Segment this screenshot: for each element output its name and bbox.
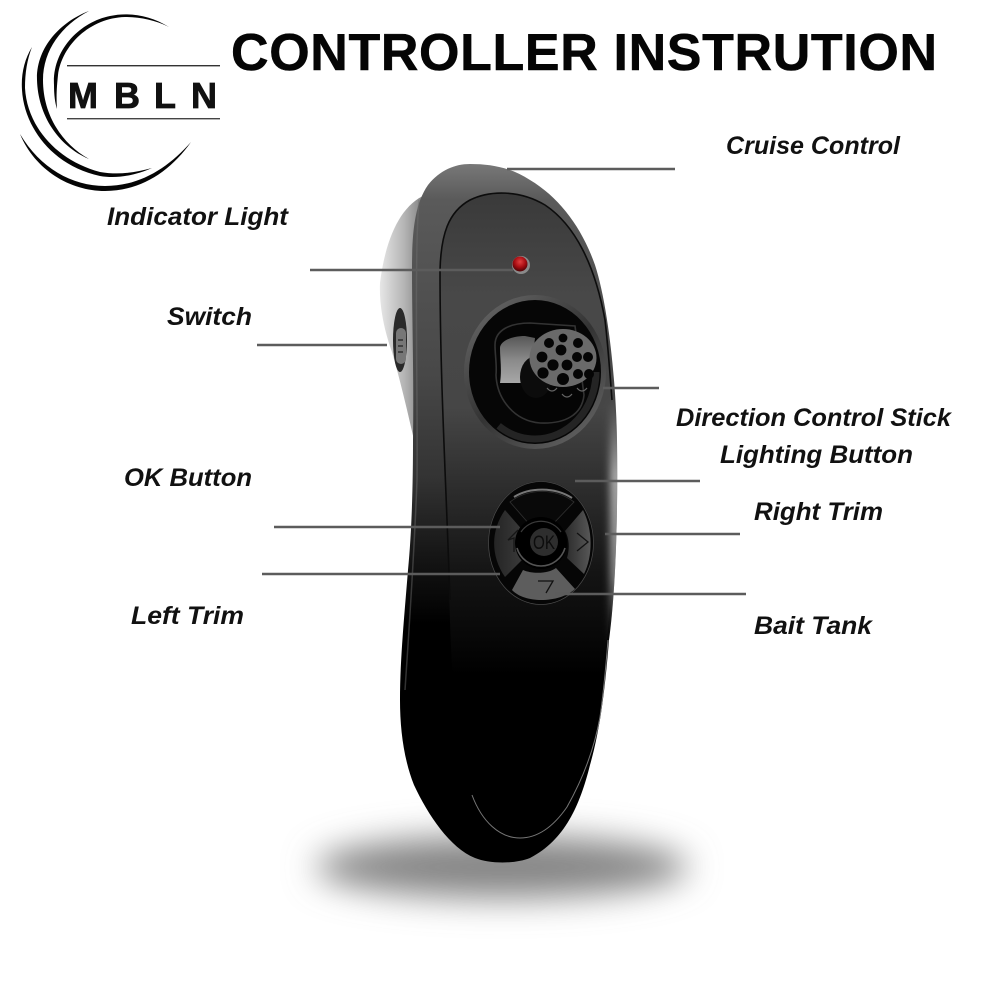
body left highlight [405,200,419,690]
down key: bait [512,568,575,600]
joystick grip [530,329,596,387]
logo: MBLN [20,11,220,191]
logo rule bottom [67,118,220,119]
body right highlight [610,400,622,650]
right key glyph [577,533,588,551]
controller [380,164,622,862]
up key highlight [514,490,572,498]
side switch [393,308,407,372]
logo arc: middle [22,47,152,177]
callout: Direction Control Stick: Direction Control Stick [676,404,952,432]
logo wordmark: MBLN [68,75,217,116]
face seam [440,193,612,600]
callout: Lighting Button: Lighting Button [720,441,913,469]
left key [494,510,525,577]
face panel [440,193,616,838]
callout: Indicator Light: Indicator Light [107,203,290,231]
up key: lighting [510,492,574,525]
callout: OK Button: OK Button [124,464,252,492]
left key glyph [508,530,518,552]
down key glyph [538,581,553,593]
indicator light [512,256,530,274]
controller side wing [380,195,430,440]
callout: Left Trim: Left Trim [131,602,244,630]
logo arc: outer [20,134,191,191]
direction pad [488,481,594,605]
title: CONTROLLER INSTRUTION [231,24,937,82]
callout: Right Trim: Right Trim [754,498,883,526]
callout: Bait Tank: Bait Tank [754,612,873,640]
logo rule top [67,65,220,66]
controller shadow [316,836,688,898]
bottom seam highlight [472,640,608,838]
logo arc: inner top [54,14,169,109]
callout: Cruise Control: Cruise Control [726,132,901,160]
right key [565,510,591,574]
controller body [400,164,617,862]
ok button: OK [533,533,555,554]
callout: Switch: Switch [167,303,252,331]
joystick housing [464,295,606,449]
logo arc: inner left [37,11,89,159]
